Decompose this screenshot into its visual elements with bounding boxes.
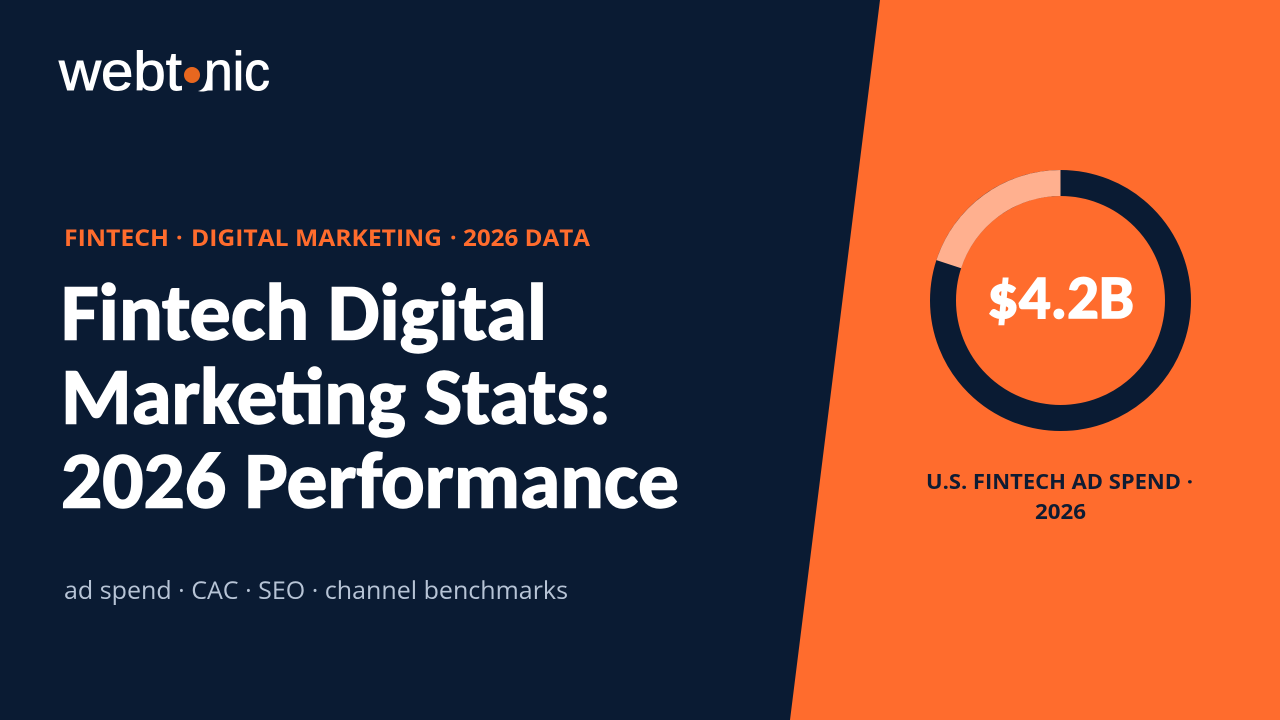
eyebrow label: 2026 DATA <box>463 221 590 253</box>
logo: webtonic: nic <box>204 40 270 102</box>
donut value: $4.2B <box>987 259 1134 335</box>
donut caption <box>926 468 1193 526</box>
donut caption: 2026 <box>1035 498 1086 526</box>
panel: orange slanted panel <box>790 0 1280 720</box>
eyebrow label <box>64 221 590 253</box>
donut navy segment <box>943 183 1178 418</box>
eyebrow label: · <box>176 221 183 253</box>
eyebrow label: · <box>450 221 457 253</box>
donut light segment <box>949 183 1060 264</box>
donut chart <box>943 183 1178 418</box>
title: Marketing Stats: <box>61 348 611 446</box>
title: Fintech Digital <box>61 264 547 362</box>
eyebrow label: DIGITAL MARKETING <box>191 221 442 253</box>
icon: logo orange dot <box>184 67 200 83</box>
logo: webtonic: webt <box>58 40 182 102</box>
logo: webtonic <box>58 40 270 102</box>
donut caption: U.S. FINTECH AD SPEND · <box>926 468 1193 496</box>
title: 2026 Performance <box>61 432 679 530</box>
subtitle: ad spend · CAC · SEO · channel benchmarks <box>64 573 568 607</box>
title <box>61 264 679 530</box>
eyebrow label: FINTECH <box>64 221 169 253</box>
